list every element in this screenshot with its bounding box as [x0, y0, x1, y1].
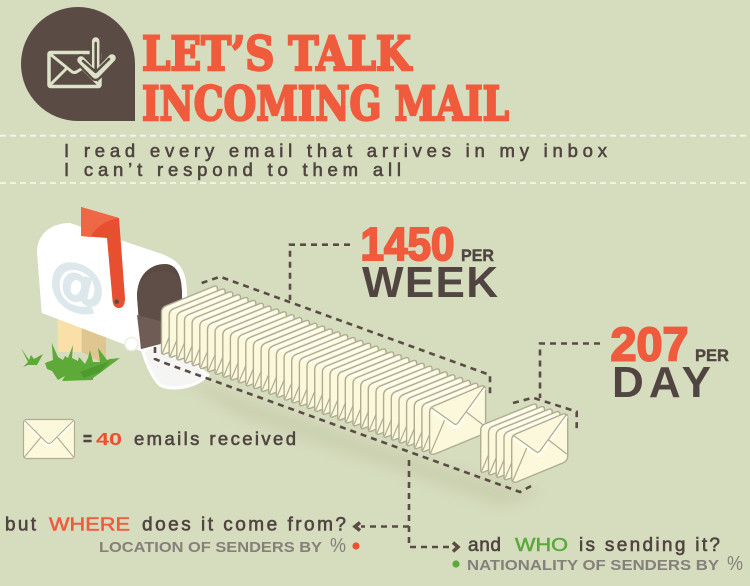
leader line: week [290, 245, 350, 300]
mailbox [21, 207, 208, 388]
title: INCOMING MAIL [142, 77, 509, 132]
icon: envelope [24, 420, 74, 458]
stat: 207 per day: 207 [610, 318, 688, 372]
heading: who: and [468, 535, 501, 556]
arrow: right [453, 542, 458, 552]
logo badge [21, 7, 135, 121]
grass [21, 343, 120, 381]
envelope stack: day [481, 404, 568, 482]
legend text: 40 [96, 429, 122, 449]
legend text: = [83, 428, 92, 449]
title [142, 27, 509, 132]
heading: who [468, 534, 720, 556]
stat: 207 per day: PER [695, 347, 729, 365]
heading: where: does it come from? [142, 515, 346, 536]
stat: 207 per day: DAY [612, 358, 711, 407]
legend: envelope key [24, 420, 296, 458]
envelope stack: week [162, 286, 486, 454]
dashed outline: large stack back [202, 277, 490, 397]
arrow: left [355, 522, 360, 530]
post [58, 318, 106, 365]
leader line: day [540, 344, 600, 398]
title: LET’S TALK [142, 27, 413, 82]
subtitle: I can’t respond to them all [64, 159, 401, 180]
subheading: location: LOCATION OF SENDERS BY [99, 539, 322, 556]
stat: 207 per day [610, 318, 729, 407]
heading: where: but [5, 515, 37, 536]
mailbox opening [137, 264, 182, 349]
heading: where [5, 514, 346, 536]
stat: 1450 per week: PER [461, 247, 494, 265]
subheading: nationality: NATIONALITY OF SENDERS BY [467, 557, 719, 574]
icon: at sign: @ [51, 246, 103, 323]
heading: where: WHERE [49, 514, 130, 535]
flag [81, 207, 125, 308]
subheading: location: % [330, 535, 346, 557]
heading: who: WHO [515, 534, 568, 555]
subheading: nationality: % [727, 553, 743, 575]
stat: 1450 per week: 1450 [360, 218, 454, 270]
legend text: emails received [134, 428, 296, 449]
icon: envelope with arrow [49, 41, 112, 86]
subheading: location [99, 535, 360, 557]
ground shadow [165, 370, 545, 507]
divider top [0, 135, 750, 137]
dashed outline: small stack back [513, 398, 577, 431]
subtitle: I read every email that arrives in my inbox [64, 140, 608, 161]
subheading: nationality [452, 553, 743, 575]
mailbox body [37, 223, 187, 352]
heading: who: is sending it? [579, 535, 720, 556]
hinge [125, 338, 138, 350]
stat: 1450 per week: WEEK [362, 258, 498, 307]
subtitle [64, 140, 608, 180]
connector lines [361, 460, 452, 547]
dashed outline: stacks front [155, 347, 533, 492]
stat: 1450 per week [360, 218, 498, 307]
mailbox door [143, 338, 208, 388]
divider bottom [0, 182, 750, 184]
